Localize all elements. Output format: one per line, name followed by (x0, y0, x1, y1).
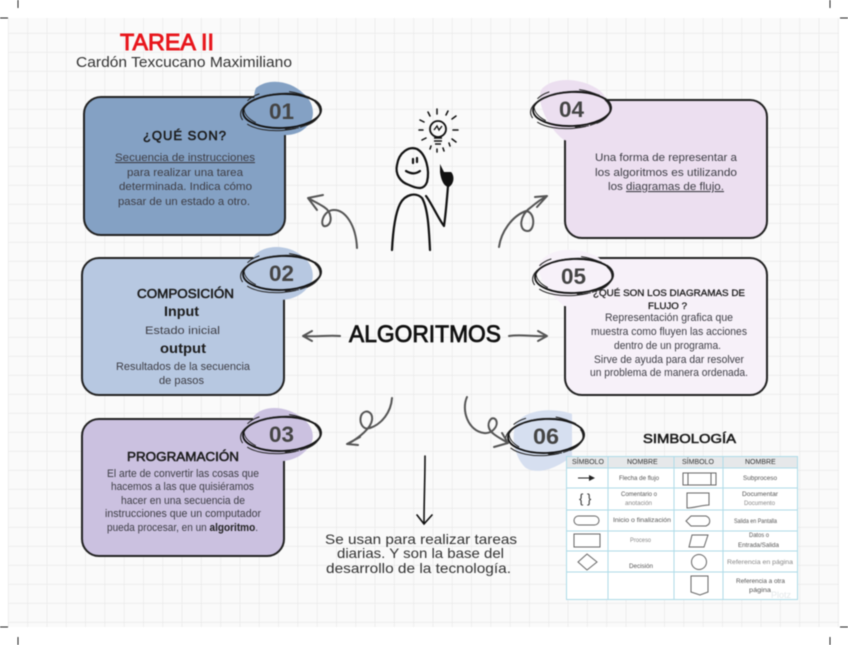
arrow: to simbología (465, 397, 508, 447)
table symbols (574, 473, 716, 595)
text: pueda procesar, en un algoritmo. (107, 522, 258, 534)
table names: Flecha de flujo (619, 475, 659, 482)
head (397, 148, 428, 188)
arrow: to programación (347, 398, 392, 445)
text: los algoritmos es utilizando (595, 167, 737, 179)
text (595, 152, 738, 193)
text: instrucciones que un computador (105, 508, 261, 520)
text: para realizar una tarea (127, 167, 244, 179)
text: output (160, 340, 206, 356)
body (392, 195, 430, 250)
text: hacemos a las que quisiéramos (111, 481, 254, 493)
central title: algoritmos: ALGORITMOS (349, 321, 501, 348)
hand (440, 164, 453, 187)
badge 02: 02 (269, 261, 294, 286)
badge 05: 05 (561, 264, 586, 289)
table header (572, 457, 776, 466)
badge 05 (531, 250, 615, 306)
text: los diagramas de flujo. (608, 181, 724, 193)
table header: SÍMBOLO (572, 457, 604, 466)
table names: Referencia a otra (736, 578, 785, 585)
table symbols: { } (579, 491, 592, 506)
text: de pasos (159, 375, 204, 387)
table names: Referencia en página (727, 559, 793, 566)
badge 04: 04 (559, 97, 585, 122)
arrow: to composición (303, 331, 340, 341)
text: un problema de manera ordenada. (590, 367, 748, 379)
text: muestra como fluyen las acciones (591, 326, 747, 338)
badge 04 (529, 80, 613, 141)
table header: NOMBRE (627, 459, 658, 466)
note text: desarrollo de la tecnología. (326, 560, 511, 576)
arrow: to forma de representar (499, 196, 547, 247)
table names: Subproceso (743, 475, 777, 482)
text: Secuencia de instrucciones (115, 152, 256, 164)
text: Una forma de representar a (595, 152, 738, 164)
note text (325, 531, 517, 576)
heading: COMPOSICIÓN (137, 286, 234, 301)
text (116, 303, 251, 387)
text: determinada. Indica cómo (119, 181, 252, 193)
arm (426, 186, 448, 226)
text: Resultados de la secuencia (116, 361, 251, 373)
text (105, 468, 261, 534)
heading: ¿QUÉ SON LOS DIAGRAMAS DE (593, 288, 745, 299)
note text: diarias. Y son la base del (337, 545, 504, 561)
heading: PROGRAMACIÓN (127, 449, 239, 464)
panel 05: diagramas de flujo (531, 250, 767, 395)
text: El arte de convertir las cosas que (107, 468, 259, 480)
author name: Cardón Texcucano Maximiliano (76, 55, 292, 71)
text: Input (164, 303, 199, 319)
illustration: person with lightbulb (392, 109, 458, 250)
table header: NOMBRE (745, 459, 776, 466)
badge 02 (239, 247, 323, 300)
table names (613, 475, 793, 594)
text: hacer en una secuencia de (121, 495, 245, 507)
panel 02: composición (82, 247, 323, 395)
table names: Datos o (749, 532, 769, 539)
panel 03: programación (82, 408, 323, 556)
badge 01 (239, 82, 323, 135)
text: Sirve de ayuda para dar resolver (594, 354, 744, 366)
title: TAREA II (120, 29, 214, 55)
arrow: to qué son (308, 195, 357, 248)
badge 06: 06 (533, 424, 559, 449)
arrow: to diagramas (509, 331, 547, 341)
heading (593, 288, 745, 312)
table names: Documento (744, 500, 775, 507)
text (115, 152, 256, 208)
table header: SÍMBOLO (682, 457, 714, 466)
symbol table heading: SIMBOLOGÍA (643, 431, 736, 446)
note text: Se usan para realizar tareas (325, 531, 517, 547)
table names: Comentario o (621, 491, 657, 498)
table names: Decisión (629, 563, 653, 570)
panel 01: qué son (84, 82, 323, 235)
heading: ¿QUÉ SON? (143, 128, 226, 143)
text: dentro de un programa. (614, 340, 721, 352)
watermark: Plotz (771, 590, 792, 600)
badge 03 (239, 408, 323, 461)
text: Representación grafica que (605, 312, 733, 324)
table names: anotación (625, 500, 652, 507)
heading: FLUJO ? (648, 301, 687, 312)
panel 04: forma de representar (529, 80, 767, 238)
badge 03: 03 (269, 422, 294, 447)
table names: página (749, 587, 771, 594)
table names: Inicio o finalización (613, 517, 671, 524)
face (406, 158, 420, 173)
badge 01: 01 (269, 99, 294, 124)
text (590, 312, 748, 379)
text: pasar de un estado a otro. (118, 196, 250, 208)
lightbulb (419, 109, 458, 152)
arrow: down to note (417, 456, 432, 524)
table names: Documentar (742, 491, 779, 498)
badge 06 (504, 410, 586, 471)
table names: Salida en Pantalla (734, 518, 777, 525)
table names: Entrada/Salida (738, 542, 779, 549)
table names: Proceso (630, 537, 651, 544)
text: Estado inicial (145, 325, 220, 337)
symbol table (566, 456, 798, 600)
